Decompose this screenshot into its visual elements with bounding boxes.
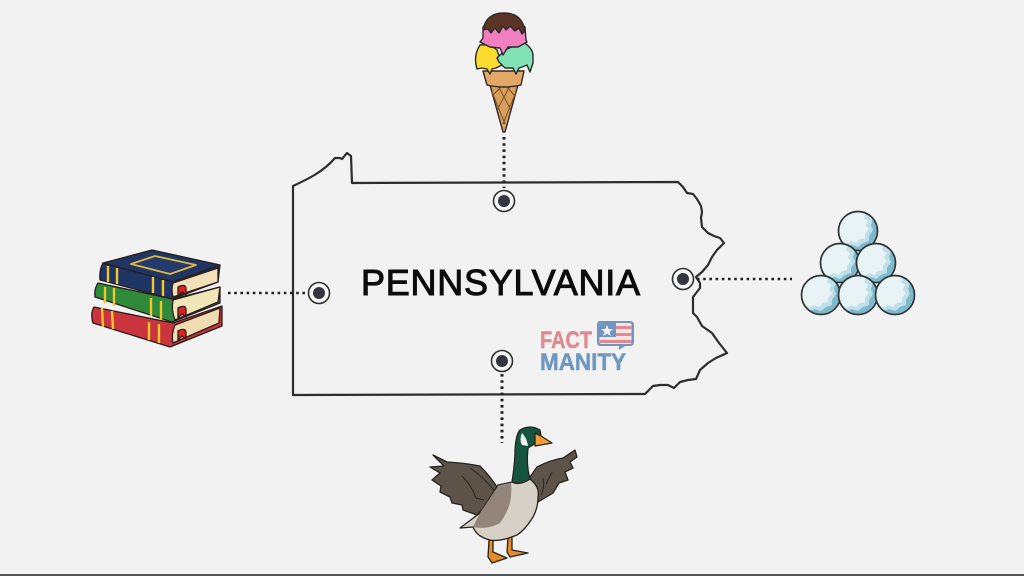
logo: Fact Manity [540, 321, 634, 376]
logo wordmark [540, 327, 626, 376]
logo speech bubble flag [597, 321, 634, 350]
chocolate scoop top [483, 13, 525, 34]
pink scoop [480, 18, 527, 55]
dotted connector: books [228, 292, 306, 294]
cone waffle pattern [492, 86, 516, 124]
marker: west [308, 282, 330, 304]
logo wordmark: MANITY [540, 349, 626, 376]
right wing detail [541, 472, 552, 495]
icon: ice cream cone [476, 13, 533, 132]
snowball top [838, 212, 878, 251]
legs and feet [488, 537, 528, 563]
navy book [100, 250, 220, 299]
dotted connector: ice cream [502, 137, 506, 188]
cheek patch [520, 433, 528, 446]
body brown flank [473, 483, 511, 528]
dotted connector: goose [500, 374, 504, 443]
marker: north [494, 190, 514, 212]
neck and head [512, 427, 541, 483]
snowball bottom right [876, 276, 915, 315]
snowball middle right [856, 244, 896, 283]
map outline: Pennsylvania [293, 153, 727, 395]
red book [92, 306, 222, 347]
icon: stack of books [92, 250, 222, 347]
body [460, 479, 538, 540]
icon: pyramid of snowballs [802, 212, 915, 315]
green scoop [497, 42, 533, 74]
logo wordmark: FACT [540, 327, 592, 354]
title: PENNSYLVANIA [361, 262, 640, 303]
marker: south [492, 350, 512, 372]
snowball bottom middle [838, 276, 878, 315]
icon: Canada goose [430, 427, 577, 563]
green book [95, 283, 220, 322]
snowball middle left [820, 244, 860, 283]
dotted connector: snowballs [697, 278, 792, 280]
yellow scoop [476, 45, 502, 74]
cone rim [483, 71, 524, 87]
right wing [530, 450, 577, 502]
left wing detail [462, 468, 494, 500]
snowball bottom left [802, 276, 841, 315]
marker: east [672, 268, 694, 290]
cone [490, 85, 518, 132]
beak [535, 433, 552, 446]
left wing [430, 455, 500, 515]
